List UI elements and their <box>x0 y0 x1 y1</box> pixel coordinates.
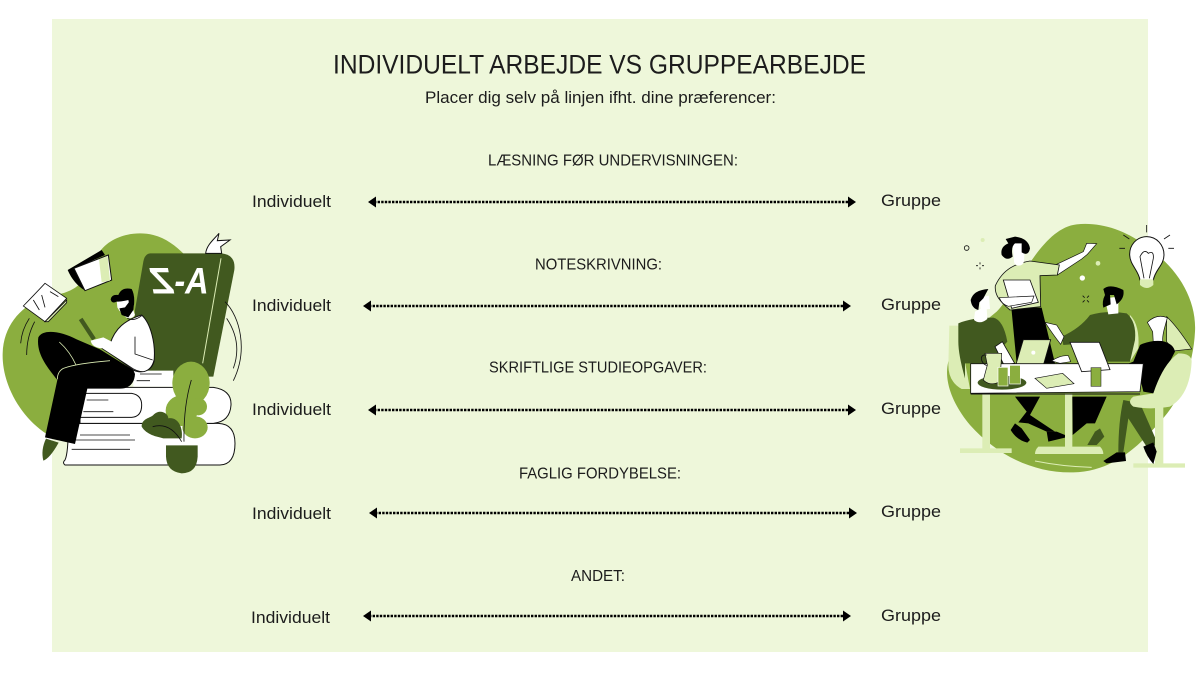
person: right woman <box>1110 316 1192 393</box>
trousers <box>1011 308 1055 363</box>
shoes <box>1011 423 1065 443</box>
green blob <box>3 233 187 434</box>
heading: ANDET: <box>571 568 625 585</box>
chair: middle back <box>1130 315 1139 362</box>
label: gruppe: Gruppe <box>881 606 941 625</box>
label: individuelt: Individuelt <box>252 296 331 315</box>
label: gruppe: Gruppe <box>881 295 941 314</box>
lower legs: left pair <box>1015 397 1055 432</box>
label: individuelt: Individuelt <box>252 504 331 523</box>
green blob <box>947 224 1195 472</box>
book stack <box>63 371 235 465</box>
heading: SKRIFTLIGE STUDIEOPGAVER: <box>489 360 707 376</box>
table legs <box>960 393 1103 454</box>
neck and head <box>1013 243 1025 266</box>
hand and arm <box>91 337 153 372</box>
heading: FAGLIG FORDYBELSE: <box>519 466 681 482</box>
pot <box>166 445 198 473</box>
person: left man <box>958 289 1015 378</box>
tablet <box>1003 280 1038 308</box>
section: noteskrivning <box>252 256 941 315</box>
sparkles <box>964 238 1100 302</box>
illustration: group working at table <box>947 224 1195 472</box>
beard <box>119 302 134 317</box>
hand <box>1052 356 1071 363</box>
light bulb <box>1119 225 1174 288</box>
label: individuelt: Individuelt <box>252 400 331 419</box>
shoe <box>42 439 59 461</box>
label: gruppe: Gruppe <box>881 399 941 418</box>
phone <box>81 319 94 339</box>
glass <box>1091 368 1101 386</box>
label: gruppe: Gruppe <box>881 502 941 521</box>
ribbon <box>206 233 230 253</box>
arrow: scale line <box>368 196 856 208</box>
large book Z-A <box>132 233 235 377</box>
subtitle: Placer dig selv på linjen ifht. dine præferencer: <box>425 89 776 107</box>
face <box>117 298 135 318</box>
lower legs: right pair <box>1072 397 1107 435</box>
chair and legs: right woman <box>1103 353 1192 468</box>
arrow: scale line <box>368 404 856 416</box>
table <box>971 356 1143 394</box>
floor highlight <box>1035 461 1092 467</box>
arrow: scale line <box>363 610 851 622</box>
book letters: -A <box>174 259 209 301</box>
hair <box>1001 237 1030 259</box>
flying book dark <box>68 250 112 291</box>
person: right man <box>1045 286 1135 362</box>
motion lines <box>21 302 241 381</box>
hair <box>111 288 134 307</box>
plant <box>142 362 210 473</box>
collar <box>127 316 142 320</box>
raised arm <box>1057 243 1097 275</box>
heading: NOTESKRIVNING: <box>535 256 662 274</box>
arm details <box>102 337 154 372</box>
person <box>38 288 154 461</box>
label: gruppe: Gruppe <box>881 191 941 210</box>
jug and glasses tray <box>978 353 1026 390</box>
magazine <box>1035 373 1074 388</box>
section: læsning før undervisningen <box>252 152 941 211</box>
arm <box>999 296 1034 306</box>
heading: LÆSNING FØR UNDERVISNINGEN: <box>488 152 738 170</box>
flying book open <box>23 283 67 322</box>
person: standing woman <box>995 237 1097 363</box>
label: individuelt: Individuelt <box>252 192 331 211</box>
section: faglig fordybelse <box>252 466 941 523</box>
shoes <box>1103 452 1126 463</box>
table legs and feet <box>960 393 1107 454</box>
laptop: right <box>1070 342 1110 372</box>
label: individuelt: Individuelt <box>251 608 330 627</box>
section: skriftlige studieopgaver <box>252 360 941 419</box>
arrow: scale line <box>369 508 857 518</box>
illustration: man reading on books <box>3 233 241 473</box>
laptop: left <box>1015 340 1051 368</box>
arrow: scale line <box>363 300 851 312</box>
shirt <box>110 315 154 372</box>
book letter Z mirrored: Z <box>149 259 174 301</box>
section: andet <box>251 568 941 627</box>
shirt <box>995 261 1059 310</box>
chair: left <box>948 326 970 389</box>
title: INDIVIDUELT ARBEJDE VS GRUPPEARBEJDE <box>333 50 866 80</box>
trousers <box>38 332 135 444</box>
